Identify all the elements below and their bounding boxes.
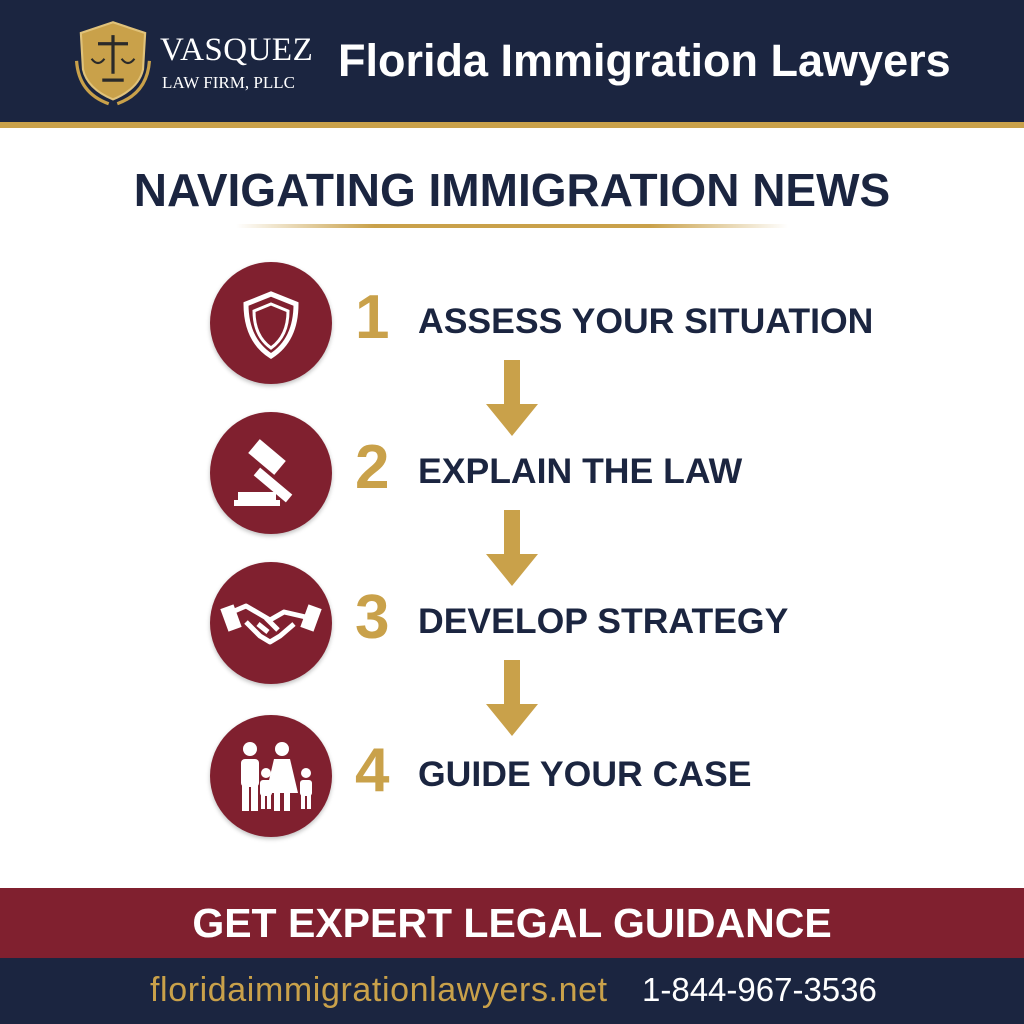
step 1: 1 <box>355 283 389 352</box>
footer <box>0 958 1024 1024</box>
step 3: 3 <box>355 583 389 652</box>
phone: 1-844-967-3536 <box>642 971 877 1008</box>
header bar <box>0 0 1024 122</box>
icon: handshake <box>210 562 332 684</box>
icon: family <box>210 715 332 837</box>
arrow 3 <box>486 660 538 736</box>
arrow 2 <box>486 510 538 586</box>
step 3: DEVELOP STRATEGY <box>418 601 788 641</box>
website: floridaimmigrationlawyers.net <box>150 971 608 1009</box>
header title: Florida Immigration Lawyers <box>338 35 951 86</box>
step 2: EXPLAIN THE LAW <box>418 451 742 491</box>
arrow 1 <box>486 360 538 436</box>
cta banner <box>0 888 1024 958</box>
cta banner: GET EXPERT LEGAL GUIDANCE <box>192 900 832 946</box>
step 2: 2 <box>355 433 389 502</box>
icon: gavel <box>210 412 332 534</box>
step 2 <box>208 412 742 538</box>
step 3 <box>208 562 788 688</box>
icon: shield <box>210 262 332 384</box>
logo: VASQUEZ <box>160 32 313 68</box>
main title: NAVIGATING IMMIGRATION NEWS <box>134 164 890 216</box>
step 4: GUIDE YOUR CASE <box>418 754 751 794</box>
logo: LAW FIRM, PLLC <box>162 73 295 92</box>
step 1: ASSESS YOUR SITUATION <box>418 301 873 341</box>
step 1 <box>208 262 873 388</box>
logo <box>75 21 313 106</box>
step 4 <box>208 714 751 842</box>
step 4: 4 <box>355 736 389 805</box>
